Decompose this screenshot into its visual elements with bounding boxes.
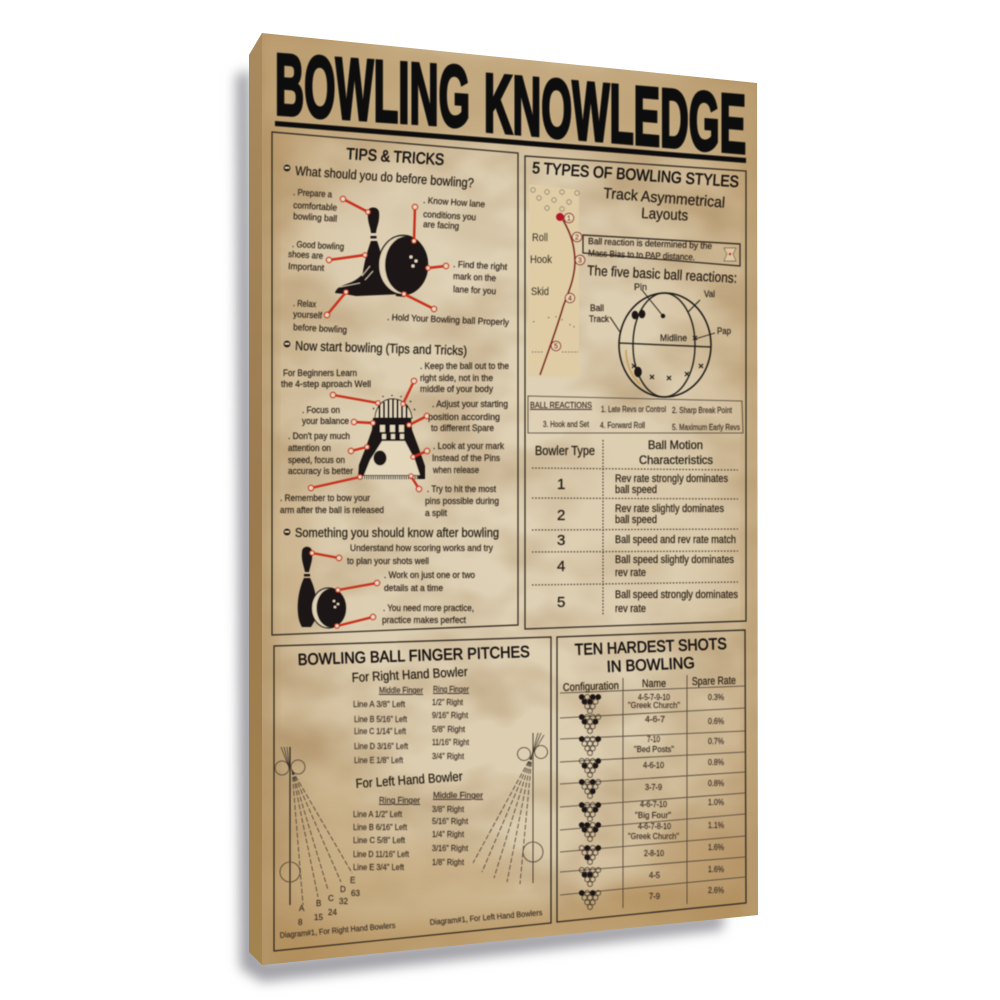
subheading: track asymmetrical layouts bbox=[603, 185, 726, 224]
tips text: start bowling: . Look at your mark bbox=[433, 441, 504, 451]
ten hardest heading: IN BOWLING bbox=[606, 655, 695, 676]
mass bias callout box: Ball reaction is determined by the bbox=[588, 236, 712, 251]
tips text: after bowling: details at a time bbox=[384, 583, 443, 593]
lane diagram: 4 bbox=[568, 296, 572, 302]
tips text: start bowling: . Try to hit the most bbox=[427, 484, 496, 494]
right hand bowler table: Middle Finger bbox=[379, 686, 423, 695]
bowler type table: Characteristics bbox=[639, 453, 713, 467]
shot names: 4-5 bbox=[649, 871, 661, 880]
section: before bowling: What should you do before bowling? bbox=[295, 163, 474, 190]
right hand bowler table: 1/2" Right bbox=[432, 698, 464, 707]
styles heading: 5 TYPES OF BOWLING STYLES bbox=[532, 160, 739, 191]
right hand bowler table: Line D 3/16" Left bbox=[354, 742, 409, 751]
shot names: "Greek Church" bbox=[628, 832, 679, 841]
icon: bowling pin, ball and shoe bbox=[335, 208, 428, 297]
bowler type table: rev rate bbox=[615, 567, 646, 579]
tips text: start bowling: . Don't pay much bbox=[288, 431, 350, 441]
subheading: track asymmetrical layouts: Layouts bbox=[641, 205, 689, 224]
tips text: start bowling: your balance bbox=[302, 416, 349, 426]
tips text: start bowling: . Adjust your starting bbox=[432, 399, 508, 409]
left hand bowler table: For Left Hand Bowler bbox=[355, 769, 464, 791]
tips text: start bowling: when release bbox=[432, 465, 479, 475]
subheading: track asymmetrical layouts: Track Asymmetrical bbox=[603, 185, 726, 212]
bowler type table: 2 bbox=[557, 507, 565, 524]
tips text: start bowling: Instead of the Pins bbox=[432, 453, 500, 463]
left hand bowler table: 1/8" Right bbox=[432, 858, 465, 867]
ball reactions legend: 5. Maximum Early Revs bbox=[672, 423, 740, 432]
diagram: right hand bowlers: 24 bbox=[328, 908, 337, 917]
spare rates: 0.3% bbox=[708, 693, 724, 702]
shot names: "Greek Church" bbox=[628, 701, 680, 710]
ball reactions legend: 3. Hook and Set bbox=[543, 420, 590, 429]
right hand bowler table: Line A 3/8" Left bbox=[353, 700, 406, 709]
mass bias callout box bbox=[583, 235, 740, 266]
diagram: right hand bowlers: 63 bbox=[351, 889, 360, 898]
ball reactions legend: 4. Forward Roll bbox=[600, 421, 645, 430]
panel: ten hardest shots bbox=[557, 630, 746, 922]
shot names bbox=[628, 693, 680, 901]
panel: bowling ball finger pitches bbox=[274, 637, 551, 951]
tips text: start bowling: a split bbox=[425, 508, 447, 518]
tips text: start bowling: arm after the ball is released bbox=[280, 505, 384, 515]
bowler type table: Ball Motion bbox=[648, 438, 703, 452]
tips text: before bowling: mark on the bbox=[453, 271, 496, 283]
diagram: right hand bowlers: B bbox=[316, 899, 321, 908]
canvas side edge bbox=[249, 33, 262, 965]
section: after bowling: Something you should know after bowling bbox=[295, 525, 499, 540]
title rule bbox=[275, 121, 746, 163]
lane diagram: Hook bbox=[530, 254, 552, 266]
ball reactions legend: BALL REACTIONS bbox=[530, 401, 592, 410]
tips text: after bowling: . Work on just one or two bbox=[384, 570, 475, 580]
bowler type table: Ball speed and rev rate match bbox=[615, 534, 736, 546]
diagram: left hand bowlers: Diagram#1, For Left Hand Bowlers bbox=[429, 908, 543, 927]
shot names: "Bed Posts" bbox=[634, 745, 674, 754]
left hand bowler table: Line E 3/4" Left bbox=[353, 863, 405, 872]
diagram: right hand bowlers: 15 bbox=[314, 913, 323, 922]
table headers: Configuration bbox=[563, 680, 619, 694]
shot names: 3-7-9 bbox=[645, 783, 662, 792]
tips text: before bowling: . Hold Your Bowling ball Properly bbox=[387, 312, 510, 327]
icon: bowling lane front view bbox=[358, 395, 425, 480]
shot names: 7-10 bbox=[647, 735, 660, 744]
tips heading: TIPS & TRICKS bbox=[346, 146, 445, 169]
ten hardest heading: TEN HARDEST SHOTS bbox=[574, 636, 727, 659]
table headers: Name bbox=[642, 678, 666, 690]
lane diagram: Roll bbox=[532, 232, 548, 244]
table headers: Spare Rate bbox=[692, 675, 736, 688]
tips text: start bowling: position according bbox=[428, 412, 500, 422]
tips text: start bowling: . Keep the ball out to the bbox=[420, 361, 509, 371]
left hand bowler table: Ring Finger bbox=[379, 796, 420, 805]
ball layout diagram: Ball bbox=[590, 303, 604, 313]
right hand bowler table: Ring Finger bbox=[433, 685, 469, 694]
lane diagram: 2 bbox=[575, 234, 579, 242]
tips text: after bowling: Understand how scoring works and try bbox=[350, 543, 493, 553]
tips text: before bowling: bowling ball bbox=[293, 211, 337, 224]
left hand bowler table: Line D 11/16" Left bbox=[353, 850, 410, 859]
tips text: before bowling: before bowling bbox=[293, 322, 347, 335]
tips text: before bowling: . Good bowling bbox=[292, 239, 344, 252]
diagram: right hand bowlers: A bbox=[299, 904, 305, 913]
tips text: start bowling: accuracy is better bbox=[288, 466, 353, 476]
ball reactions legend: 2. Sharp Break Point bbox=[672, 406, 733, 415]
tips text: before bowling: . Know How lane bbox=[423, 195, 485, 209]
right hand bowler table: Line C 1/14" Left bbox=[354, 727, 407, 736]
left hand bowler table: 3/16" Right bbox=[432, 844, 469, 853]
lane diagram bbox=[528, 184, 585, 377]
tips text: before bowling: conditions you bbox=[423, 209, 476, 222]
ball reactions legend: 1. Late Revs or Control bbox=[601, 405, 666, 414]
five basic ball reactions heading: The five basic ball reactions: bbox=[587, 262, 737, 286]
bowler type table: Rev rate slightly dominates bbox=[615, 503, 724, 515]
left hand bowler table bbox=[353, 769, 483, 872]
panel: tips and tricks bbox=[272, 132, 518, 635]
title: BOWLING bbox=[275, 36, 470, 146]
right hand bowler table: 3/4" Right bbox=[432, 752, 465, 761]
right hand bowler table: 5/8" Right bbox=[432, 725, 466, 734]
diagram: right hand bowlers: E bbox=[350, 876, 355, 885]
ball layout diagram: Val bbox=[704, 289, 715, 299]
left hand bowler table: Line A 1/2" Left bbox=[353, 810, 403, 819]
tips text: start bowling: speed, focus on bbox=[288, 455, 345, 465]
tips text: before bowling: . Prepare a bbox=[293, 187, 332, 199]
tips text: before bowling: lane for you bbox=[453, 284, 496, 296]
tips text: start bowling: For Beginners Learn bbox=[283, 368, 357, 378]
bowler type table: Ball speed strongly dominates bbox=[615, 589, 738, 601]
tips text: start bowling: attention on bbox=[288, 443, 331, 453]
lane diagram: 3 bbox=[578, 258, 582, 264]
spare rates bbox=[708, 693, 724, 895]
bowler type table bbox=[532, 438, 738, 615]
shot names: 7-9 bbox=[649, 892, 661, 901]
lane diagram: 5 bbox=[554, 344, 558, 350]
ball layout diagram: Pap bbox=[717, 326, 731, 336]
bowler type table: Ball speed slightly dominates bbox=[615, 554, 734, 566]
tips text: start bowling: middle of your body bbox=[420, 384, 493, 394]
right hand bowler table: For Right Hand Bowler bbox=[351, 664, 469, 685]
bowler type table: rev rate bbox=[615, 603, 646, 615]
bowler type table: 3 bbox=[557, 532, 565, 549]
bowler type table: 5 bbox=[557, 594, 565, 611]
ball layout diagram bbox=[589, 282, 731, 397]
tips text: before bowling bbox=[288, 187, 510, 335]
spare rates: 1.1% bbox=[708, 821, 724, 830]
tips text: start bowling bbox=[280, 361, 509, 518]
right hand bowler table: 11/16" Right bbox=[432, 738, 470, 747]
diagram: right hand bowlers bbox=[275, 747, 396, 940]
spare rates: 0.8% bbox=[708, 779, 724, 788]
tips text: start bowling: . Remember to bow your bbox=[280, 493, 370, 503]
diagram: right hand bowlers: 32 bbox=[339, 897, 348, 906]
tips text: before bowling: Important bbox=[288, 261, 325, 273]
lane diagram: 1 bbox=[567, 216, 571, 222]
diagram: right hand bowlers: Diagram#1, For Right Hand Bowlers bbox=[279, 921, 396, 940]
left hand bowler table: 1/4" Right bbox=[432, 830, 465, 839]
red callout lines, before bowling bbox=[324, 196, 449, 318]
bowler type table: 1 bbox=[557, 476, 565, 493]
shot names: 4-5-7-9-10 bbox=[638, 693, 670, 702]
ten hardest heading bbox=[574, 636, 727, 676]
bowler type table: Rev rate strongly dominates bbox=[615, 473, 728, 485]
spare rates: 0.8% bbox=[708, 758, 724, 767]
bowler type table: 4 bbox=[557, 558, 565, 575]
shot names: 4-6-7-8-10 bbox=[638, 822, 671, 831]
mass bias callout box: Mass Bias to to PAP distance. bbox=[588, 248, 695, 262]
diagram: left hand bowlers bbox=[429, 733, 548, 927]
shot names: 2-8-10 bbox=[644, 849, 664, 858]
canvas drop shadow bbox=[236, 70, 725, 982]
tips text: after bowling: practice makes perfect bbox=[382, 615, 466, 625]
table grid bbox=[560, 675, 745, 908]
tips text: after bowling bbox=[347, 543, 493, 625]
table headers bbox=[563, 675, 736, 694]
shot names: 4-6-10 bbox=[643, 761, 665, 770]
diagram: right hand bowlers: C bbox=[328, 894, 334, 903]
right hand bowler table: Line B 5/16" Left bbox=[354, 715, 408, 724]
diagram: right hand bowlers: 8 bbox=[298, 918, 303, 927]
lane diagram: Skid bbox=[531, 286, 549, 298]
icon: pin and ball bbox=[298, 547, 346, 628]
spare rates: 1.6% bbox=[708, 865, 724, 874]
tips text: start bowling: right side, not in the bbox=[420, 373, 493, 383]
canvas paper background bbox=[255, 33, 761, 975]
tips text: before bowling: yourself bbox=[293, 309, 323, 321]
bowler type table: ball speed bbox=[615, 514, 657, 526]
finger pitches heading: BOWLING BALL FINGER PITCHES bbox=[298, 644, 530, 669]
panel: 5 types of bowling styles bbox=[525, 156, 746, 629]
tips text: before bowling: shoes are bbox=[288, 249, 323, 261]
tips text: start bowling: pins possible during bbox=[425, 496, 499, 506]
right hand bowler table: 9/16" Right bbox=[432, 711, 469, 720]
bowler type table: Bowler Type bbox=[535, 443, 595, 458]
spare rates: 1.6% bbox=[708, 843, 724, 852]
tips text: start bowling: to different Spare bbox=[431, 423, 494, 433]
left hand bowler table: 3/8" Right bbox=[432, 805, 465, 814]
ball reactions legend bbox=[528, 396, 743, 433]
left hand bowler table: Line C 5/8" Left bbox=[353, 836, 406, 845]
bowler type table: ball speed bbox=[615, 484, 657, 496]
ball layout diagram: Track bbox=[589, 314, 609, 324]
spare rates: 1.0% bbox=[708, 798, 724, 807]
right hand bowler table bbox=[351, 664, 470, 765]
pin configuration icons bbox=[579, 694, 601, 910]
right hand bowler table: Line E 1/8" Left bbox=[354, 756, 404, 765]
tips text: before bowling: comfortable bbox=[293, 200, 337, 213]
shot names: 4-6-7 bbox=[645, 715, 666, 724]
left hand bowler table: Middle Finger bbox=[433, 791, 483, 800]
spare rates: 2.6% bbox=[708, 886, 724, 895]
tips text: before bowling: . Relax bbox=[293, 298, 317, 309]
tips text: before bowling: are facing bbox=[423, 219, 459, 231]
tips text: before bowling: . Find the right bbox=[453, 259, 508, 272]
tips text: after bowling: to plan your shots well bbox=[347, 556, 429, 566]
left hand bowler table: Line B 6/16" Left bbox=[353, 823, 408, 832]
ball layout diagram: Midline bbox=[660, 333, 687, 343]
ball layout diagram: Pin bbox=[634, 282, 647, 292]
tips text: start bowling: . Focus on bbox=[302, 405, 340, 415]
left hand bowler table: 5/16" Right bbox=[432, 817, 469, 826]
red callout lines, after bowling bbox=[310, 551, 380, 628]
shot names: 4-6-7-10 bbox=[640, 800, 667, 809]
tips text: start bowling: the 4-step aproach Well bbox=[281, 379, 371, 389]
red callout lines, start bowling bbox=[308, 378, 430, 492]
tips text: after bowling: . You need more practice, bbox=[383, 603, 474, 613]
shot names: "Big Four" bbox=[635, 811, 671, 820]
diagram: right hand bowlers: D bbox=[340, 885, 346, 894]
spare rates: 0.7% bbox=[708, 737, 724, 746]
spare rates: 0.6% bbox=[708, 717, 724, 726]
section: now start bowling: Now start bowling (Tips and Tricks) bbox=[295, 338, 467, 358]
